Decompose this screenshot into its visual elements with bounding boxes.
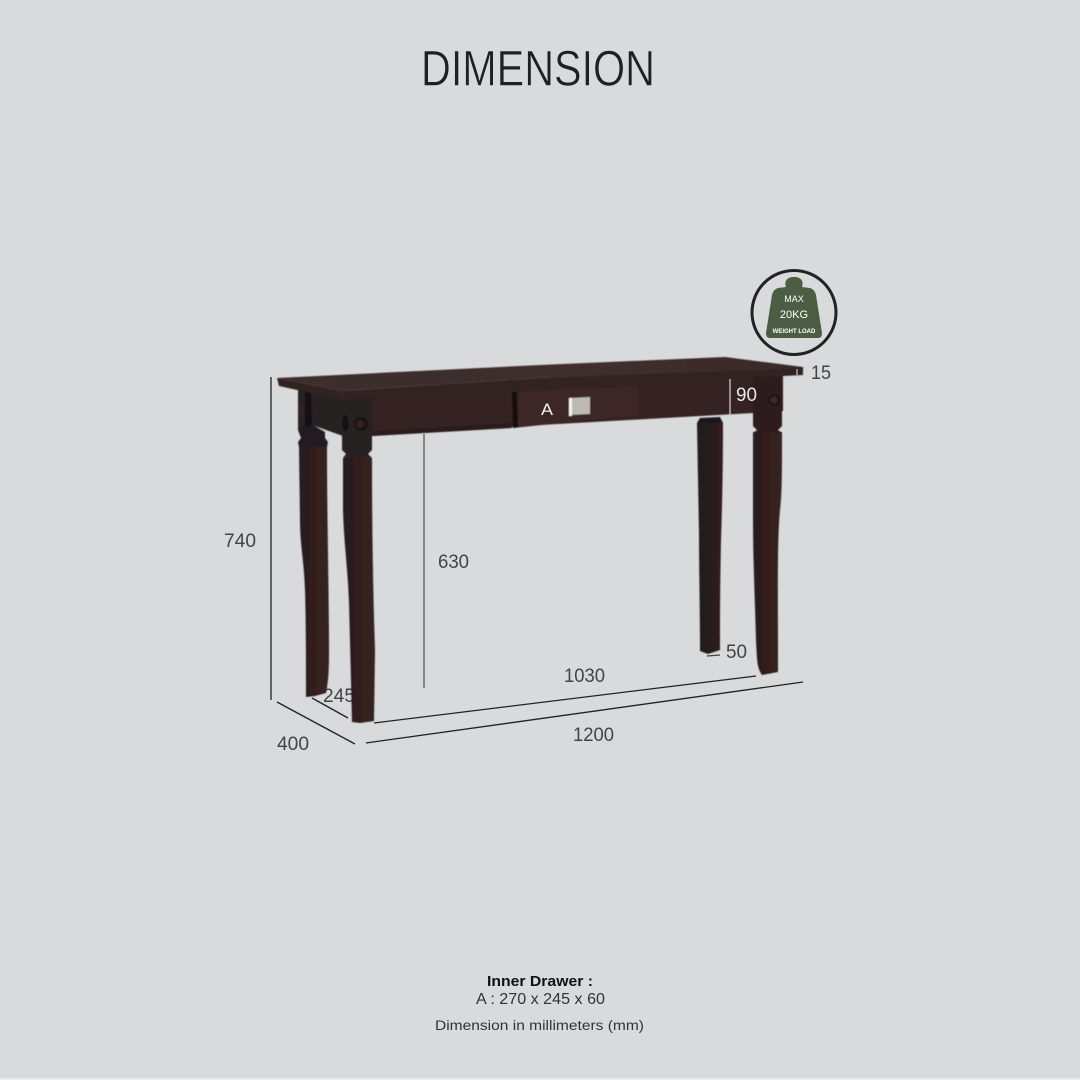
drawer xyxy=(512,386,638,428)
dimension labels: 1030 xyxy=(564,666,605,687)
dimension labels: 245 xyxy=(323,686,355,707)
90 height marker: 90 xyxy=(736,385,757,406)
dimension labels: 400 xyxy=(277,734,309,755)
90 height marker xyxy=(730,379,757,415)
title: DIMENSION xyxy=(421,40,655,96)
inner drawer note: Inner Drawer : xyxy=(487,973,593,990)
inner drawer note xyxy=(435,973,644,1033)
dimension labels xyxy=(224,363,831,755)
badge: max 20kg weight load: WEIGHT LOAD xyxy=(773,329,816,335)
15 thickness tick xyxy=(796,369,798,375)
table top xyxy=(277,357,803,400)
bottom edge xyxy=(0,1078,1080,1080)
dimension labels: 50 xyxy=(726,642,747,663)
icon: weight xyxy=(766,277,822,338)
dimension labels: 630 xyxy=(438,552,469,573)
back right leg xyxy=(697,417,723,654)
front left post detail xyxy=(342,415,368,431)
back left leg xyxy=(298,388,329,697)
dimension labels: 15 xyxy=(811,363,831,384)
inner drawer note: Dimension in millimeters (mm) xyxy=(435,1018,644,1033)
front right post xyxy=(753,375,782,433)
drawer label A: A xyxy=(541,400,554,419)
badge: max 20kg weight load: 20KG xyxy=(780,309,808,321)
dimension labels: 1200 xyxy=(573,725,614,746)
table: console with drawer and four legs xyxy=(277,357,803,723)
front right leg xyxy=(753,432,782,675)
apron xyxy=(372,368,783,436)
badge: max 20kg weight load xyxy=(752,270,836,354)
drawer handle xyxy=(569,397,590,416)
dimension labels: 740 xyxy=(224,531,256,552)
badge: max 20kg weight load: MAX xyxy=(784,294,804,304)
front left leg xyxy=(342,395,375,723)
inner drawer note: A : 270 x 245 x 60 xyxy=(476,991,605,1008)
side rail xyxy=(298,390,343,436)
dimension lines xyxy=(271,377,803,744)
